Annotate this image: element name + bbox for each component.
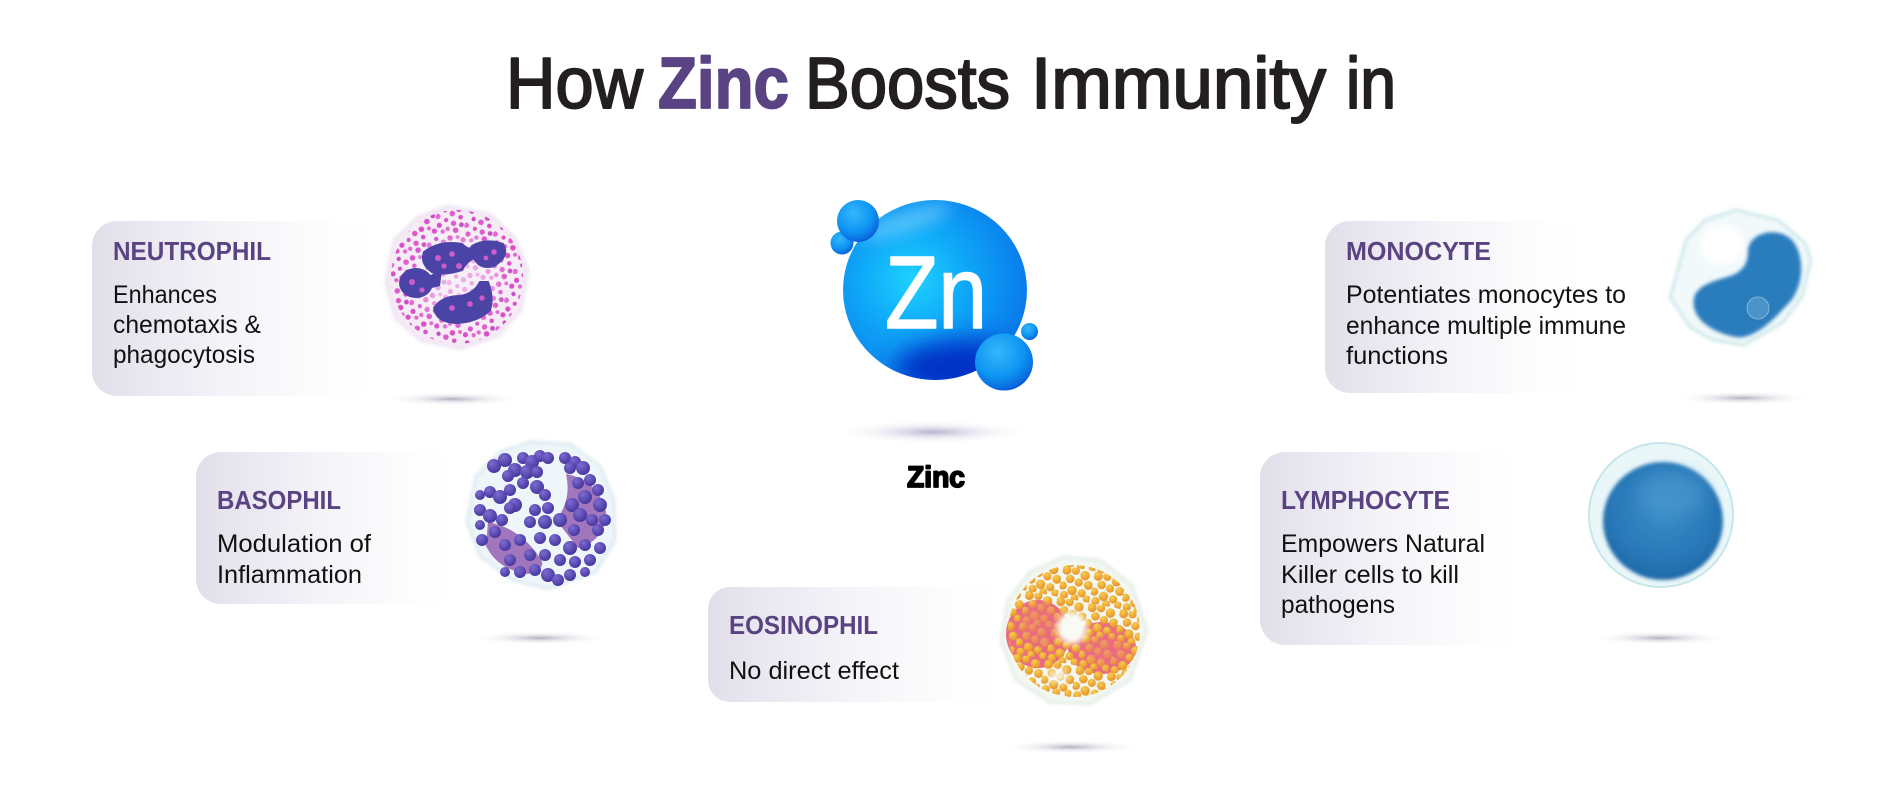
- title: Boosts: [805, 44, 1010, 124]
- panel: basophil: BASOPHIL: [217, 485, 341, 515]
- panel: neutrophil: phagocytosis: [113, 341, 255, 369]
- panel: lymphocyte: LYMPHOCYTE: [1281, 485, 1450, 515]
- icon: zinc sphere: Zn: [885, 235, 987, 350]
- panel: neutrophil: NEUTROPHIL: [113, 236, 271, 266]
- label: Zinc: Zinc: [907, 461, 965, 494]
- zinc shadow: [833, 420, 1033, 444]
- title: Immunity: [1031, 44, 1326, 124]
- panel: monocyte: Potentiates monocytes to: [1346, 281, 1626, 309]
- title: in: [1346, 44, 1396, 124]
- title: How: [506, 44, 644, 124]
- panel: lymphocyte: pathogens: [1281, 591, 1395, 619]
- panel: eosinophil: EOSINOPHIL: [729, 610, 878, 640]
- panel: lymphocyte: Killer cells to kill: [1281, 561, 1459, 589]
- panel: eosinophil: No direct effect: [729, 657, 899, 685]
- panel: lymphocyte: [1260, 452, 1530, 645]
- panel: lymphocyte: Empowers Natural: [1281, 530, 1485, 558]
- panel: monocyte: MONOCYTE: [1346, 236, 1491, 266]
- icon: monocyte cell: [1670, 210, 1813, 405]
- icon: zinc sphere: [830, 198, 1038, 396]
- icon: lymphocyte cell: [1589, 443, 1733, 645]
- panel: basophil: Modulation of: [217, 530, 371, 558]
- panel: monocyte: enhance multiple immune: [1346, 312, 1626, 340]
- icon: basophil cell: [467, 442, 615, 645]
- panel: basophil: [196, 452, 462, 604]
- icon: neutrophil cell: [383, 205, 528, 406]
- title: [506, 44, 1396, 124]
- icon: eosinophil cell: [1001, 556, 1147, 754]
- title: Zinc: [658, 44, 789, 124]
- panel: neutrophil: chemotaxis &: [113, 311, 261, 339]
- panel: neutrophil: [92, 221, 382, 396]
- panel: basophil: Inflammation: [217, 561, 362, 589]
- panel: eosinophil: [708, 587, 1008, 702]
- panel: monocyte: functions: [1346, 342, 1448, 370]
- panel: neutrophil: Enhances: [113, 281, 217, 309]
- panel: monocyte: [1325, 221, 1626, 393]
